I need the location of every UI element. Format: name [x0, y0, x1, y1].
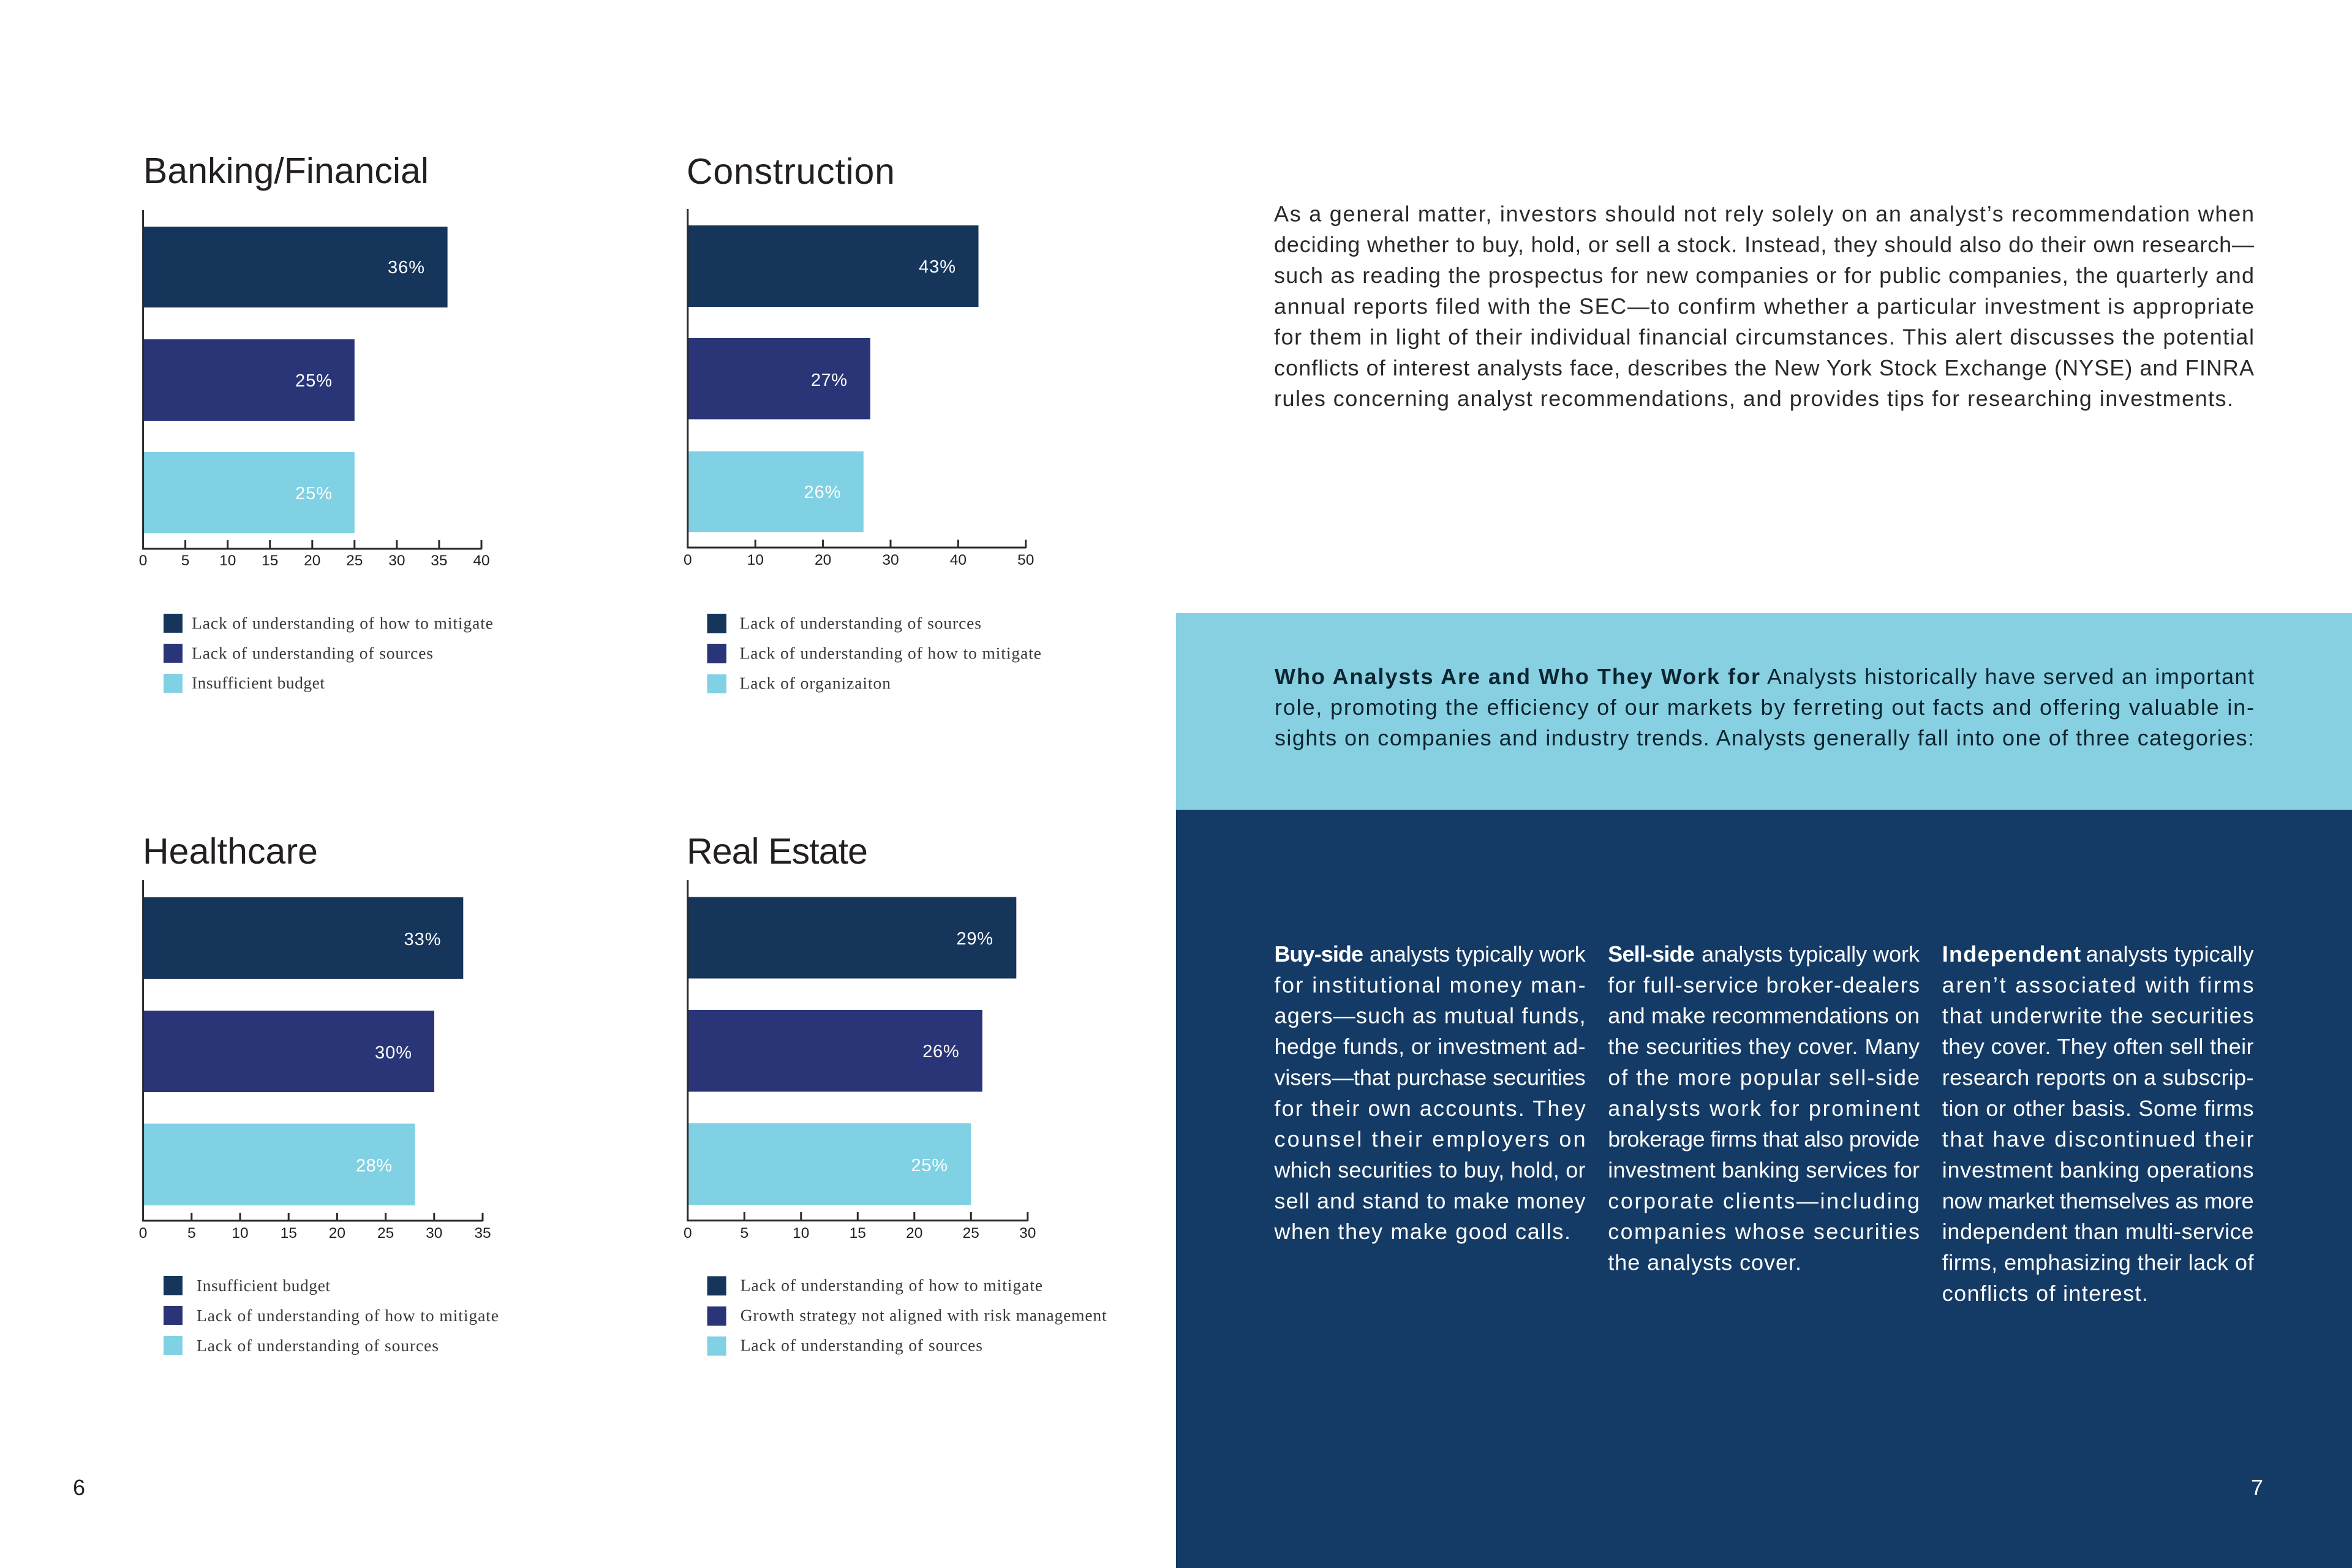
text block: sell-side analysts: brokerage firms that also provide [1608, 1126, 1920, 1152]
legend: Lack of understanding of how to mitigate [740, 643, 1041, 663]
x axis: 0 [139, 552, 147, 569]
x axis: 20 [815, 552, 831, 568]
text block: independent analysts: that underwrite the securities [1942, 1003, 2254, 1028]
text block: independent analysts: analysts typically [2086, 941, 2254, 967]
panel: light blue band [1176, 613, 2352, 810]
text block: who analysts are: sights on companies and industry trends. Analysts generally fall into one of three categories: [1275, 725, 2254, 750]
x axis: 5 [181, 552, 189, 569]
legend: Lack of understanding of how to mitigate [192, 614, 493, 632]
text block: who analysts are: Who Analysts Are and Who They Work for [1275, 664, 1760, 689]
legend: Insufficient budget [192, 673, 325, 692]
text block: buy-side analysts [1274, 941, 1586, 1244]
x axis: 15 [850, 1225, 866, 1242]
panel: navy block [1176, 810, 2352, 1568]
text block: introduction paragraph: deciding whether to buy, hold, or sell a stock. Instead, they should also do their own research— [1274, 232, 2254, 257]
legend: Insufficient budget [197, 1276, 330, 1295]
chart: Real Estate [684, 831, 1107, 1356]
bar: 36%: 36% [388, 258, 424, 277]
bar: 30% [143, 1011, 434, 1092]
text block: independent analysts: they cover. They often sell their [1942, 1034, 2254, 1059]
text block: buy-side analysts: hedge funds, or investment ad- [1274, 1034, 1586, 1059]
page number 6: 6 [73, 1475, 85, 1500]
text block: buy-side analysts: which securities to buy, hold, or [1274, 1158, 1586, 1182]
text block: who analysts are [1275, 664, 2254, 750]
bar: 29%: 29% [957, 929, 993, 949]
x axis: 20 [329, 1225, 345, 1242]
text block: introduction paragraph [1274, 201, 2254, 411]
bar: 27%: 27% [811, 371, 847, 390]
legend: Lack of understanding of how to mitigate [741, 1275, 1042, 1295]
x axis: 0 [684, 552, 692, 568]
text block: who analysts are: Analysts historically have served an important [1767, 664, 2254, 689]
text block: sell-side analysts: companies whose securities [1608, 1219, 1920, 1244]
text block: independent analysts: investment banking operations [1942, 1158, 2254, 1182]
bar: 26% [688, 451, 864, 532]
text block: buy-side analysts: analysts typically work [1370, 941, 1586, 967]
x axis: 5 [187, 1225, 196, 1242]
bar: 28% [143, 1123, 415, 1205]
bar: 43% [688, 225, 979, 307]
bar: 26%: 26% [922, 1042, 959, 1061]
text block: buy-side analysts: for their own accounts. They [1274, 1096, 1586, 1121]
x axis [684, 209, 1034, 568]
x axis: 5 [740, 1225, 748, 1242]
text block: independent analysts: firms, emphasizing their lack of [1942, 1250, 2254, 1275]
text block: independent analysts: research reports on a subscrip- [1942, 1065, 2254, 1090]
bar: 33%: 33% [404, 930, 441, 949]
text block: sell-side analysts: Sell-side [1608, 941, 1695, 967]
text block: who analysts are: role, promoting the efficiency of our markets by ferreting out facts and offering valuable in- [1275, 695, 2254, 720]
text block: sell-side analysts: investment banking services for [1608, 1158, 1920, 1182]
bar: 26% [688, 1010, 982, 1091]
chart: Healthcare [139, 831, 499, 1355]
legend [164, 1276, 499, 1355]
legend: Lack of understanding of sources [741, 1335, 982, 1355]
x axis [684, 880, 1036, 1242]
text block: sell-side analysts: corporate clients—including [1608, 1188, 1920, 1213]
bar: 30%: 30% [375, 1043, 412, 1063]
text block: buy-side analysts: agers—such as mutual funds, [1274, 1003, 1586, 1028]
bar: 25%: 25% [911, 1156, 948, 1175]
x axis: 25 [346, 552, 363, 569]
legend [164, 614, 493, 693]
text block: buy-side analysts: sell and stand to make money [1274, 1188, 1586, 1213]
x axis: 10 [232, 1225, 249, 1242]
bar: 33% [143, 897, 463, 979]
bar: 28%: 28% [356, 1156, 392, 1176]
text block: sell-side analysts: analysts typically work [1702, 941, 1920, 967]
x axis: 20 [906, 1225, 922, 1242]
text block: sell-side analysts [1608, 941, 1920, 1275]
x axis: 35 [474, 1225, 491, 1242]
text block: independent analysts: aren’t associated with firms [1942, 972, 2254, 997]
x axis: 40 [473, 552, 490, 569]
legend: Lack of understanding of how to mitigate [197, 1306, 499, 1325]
legend [707, 614, 1041, 693]
text block: introduction paragraph: for them in light of their individual financial circumstances. This alert discusses the potential [1274, 325, 2254, 349]
x axis: 20 [304, 552, 320, 569]
text block: independent analysts: now market themselves as more [1942, 1188, 2254, 1213]
text block: sell-side analysts: analysts work for prominent [1608, 1096, 1920, 1121]
bar: 29% [688, 897, 1016, 979]
legend: Lack of organizaiton [740, 674, 891, 692]
x axis: 15 [281, 1225, 297, 1242]
x axis: 10 [747, 552, 764, 568]
x axis: 30 [882, 552, 899, 568]
legend [707, 1275, 1107, 1356]
text block: independent analysts: independent than multi-service [1942, 1219, 2254, 1244]
x axis: 50 [1017, 552, 1034, 568]
bar: 25% budget [143, 452, 355, 533]
text block: sell-side analysts: the analysts cover. [1608, 1250, 1801, 1275]
text block: introduction paragraph: conflicts of interest analysts face, describes the New York Stock Exchange (NYSE) and FINRA [1274, 355, 2254, 380]
text block: buy-side analysts: for institutional money man- [1274, 972, 1586, 997]
page number 7: 7 [2251, 1475, 2263, 1500]
heading: Healthcare: Healthcare [143, 831, 318, 872]
text block: sell-side analysts: for full-service broker-dealers [1608, 972, 1920, 997]
text block: sell-side analysts: of the more popular sell-side [1608, 1065, 1920, 1090]
text block: introduction paragraph: rules concerning analyst recommendations, and provides tips for researching investments. [1274, 386, 2233, 411]
x axis [139, 210, 490, 569]
x axis: 10 [219, 552, 236, 569]
text block: independent analysts: conflicts of interest. [1942, 1281, 2148, 1306]
heading: Real Estate: Real Estate [687, 831, 868, 872]
text block: buy-side analysts: when they make good calls. [1274, 1219, 1570, 1244]
bar: 27% [688, 338, 870, 419]
text block: introduction paragraph: As a general matter, investors should not rely solely on an analyst’s recommendation when [1274, 201, 2254, 227]
text block: independent analysts: that have discontinued their [1942, 1126, 2254, 1152]
bar: 25% budget: 25% [295, 484, 332, 503]
text block: sell-side analysts: the securities they cover. Many [1608, 1034, 1920, 1059]
bar: 25% [688, 1123, 971, 1205]
x axis: 15 [262, 552, 278, 569]
x axis: 25 [963, 1225, 979, 1242]
heading: Banking/Financial: Banking/Financial [143, 151, 429, 191]
x axis: 0 [684, 1225, 692, 1242]
x axis: 30 [426, 1225, 442, 1242]
text block: independent analysts: Independent [1942, 941, 2081, 967]
text block: independent analysts: tion or other basis. Some firms [1942, 1096, 2254, 1121]
chart: Banking/Financial [139, 151, 493, 693]
text block: buy-side analysts: Buy-side [1274, 941, 1363, 967]
bar: 36% [143, 227, 448, 307]
legend: Lack of understanding of sources [740, 614, 981, 632]
bar: 25% sources [143, 339, 355, 421]
x axis [139, 880, 491, 1242]
x axis: 30 [1019, 1225, 1036, 1242]
text block: buy-side analysts: visers—that purchase securities [1274, 1065, 1586, 1090]
text block: sell-side analysts: and make recommendations on [1608, 1003, 1920, 1028]
x axis: 0 [139, 1225, 147, 1242]
x axis: 10 [793, 1225, 809, 1242]
legend: Lack of understanding of sources [192, 643, 433, 663]
chart: Construction [684, 151, 1041, 693]
x axis: 25 [377, 1225, 394, 1242]
legend: Growth strategy not aligned with risk management [741, 1306, 1107, 1324]
text block: buy-side analysts: counsel their employers on [1274, 1126, 1586, 1152]
bar: 43%: 43% [919, 257, 956, 277]
text block: introduction paragraph: annual reports filed with the SEC—to confirm whether a particular investment is appropriate [1274, 294, 2254, 318]
x axis: 30 [388, 552, 405, 569]
x axis: 35 [431, 552, 448, 569]
x axis: 40 [950, 552, 967, 568]
bar: 25% sources: 25% [295, 371, 332, 391]
text block: introduction paragraph: such as reading the prospectus for new companies or for public companies, the quarterly and [1274, 263, 2254, 288]
text block: independent analysts [1942, 941, 2254, 1306]
heading: Construction: Construction [687, 151, 895, 192]
bar: 26%: 26% [804, 483, 840, 502]
legend: Lack of understanding of sources [197, 1336, 439, 1355]
